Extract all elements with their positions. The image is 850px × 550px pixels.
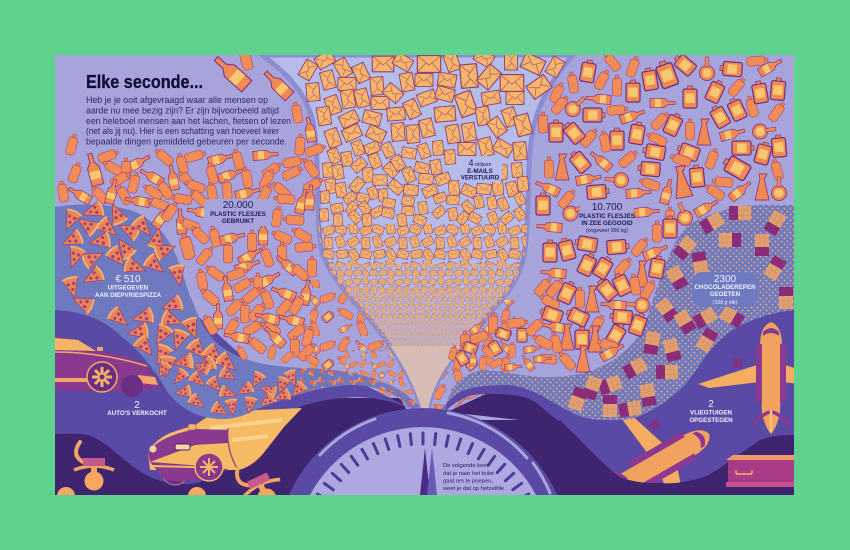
email funnel background	[262, 55, 573, 412]
toilet note: gaat om te poepen,	[443, 478, 493, 484]
label: plastic bottles used	[204, 199, 272, 226]
label: bottles in the sea	[579, 200, 635, 235]
label: emails: 4 miljoen	[469, 158, 492, 168]
intro text: (net als jij nu). Hier is een schatting van hoeveel keer	[86, 126, 279, 136]
big bottles at top	[213, 55, 326, 158]
envelopes	[298, 48, 565, 227]
dark purple lower band	[55, 392, 794, 495]
label: cars	[107, 401, 167, 415]
coffin	[726, 455, 794, 487]
intro text: Heb je je ooit afgevraagd waar alle mensen op	[86, 95, 268, 105]
label: chocolate: GEGETEN	[710, 291, 741, 298]
label: cars: AUTO'S VERKOCHT	[107, 410, 167, 417]
left plastic bottles	[57, 133, 325, 366]
label: pizza: UITGEGEVEN	[108, 284, 149, 292]
label: planes	[690, 400, 732, 422]
chocolate region	[440, 205, 794, 420]
label: emails: E-MAILS	[467, 168, 493, 175]
car region	[55, 300, 412, 484]
label: chocolate: (100 g elk)	[713, 300, 738, 306]
label: bottles in the sea: IN ZEE GEGOOID	[581, 220, 633, 227]
toilet note: De volgende keer	[443, 463, 489, 469]
label: bottles in the sea: PLASTIC FLESJES	[579, 213, 635, 220]
label: emails: VERSTUURD	[461, 174, 500, 182]
label: planes: VLIEGTUIGEN	[690, 410, 732, 416]
toilet note: weet je dat op hetzelfde	[442, 486, 504, 492]
alarm clock dial	[289, 408, 557, 500]
intro text: aarde nu mee bezig zijn? Er zijn bijvoorbeeld altijd	[86, 106, 279, 116]
intro text	[86, 95, 291, 146]
label: pizza	[95, 275, 161, 297]
yellow car	[148, 408, 302, 485]
left car	[55, 336, 160, 397]
intro text: een heleboel mensen aan het lachen, fietsen of lezen	[86, 116, 291, 126]
pacifiers	[57, 440, 280, 495]
label: planes: OPGESTEGEN	[689, 417, 733, 424]
toilet note: dat je naar het toilet	[443, 471, 494, 477]
plane region	[440, 300, 794, 483]
label: bottles in the sea: (ongeveer 350 kg)	[586, 228, 628, 234]
label: chocolate: 2300	[714, 274, 737, 285]
chocolate bars	[568, 206, 793, 418]
label: chocolate: CHOCOLADEREPEN	[694, 284, 756, 291]
label: planes: 2	[708, 399, 714, 410]
label: plastic bottles used: GEBRUIKT	[222, 218, 254, 225]
label: bottles in the sea: 10.700	[592, 202, 623, 213]
label: pizza: € 510	[115, 274, 141, 285]
pizza slices	[59, 200, 308, 420]
label: emails	[459, 156, 502, 182]
label: pizza: AAN DIEPVRIESPIZZA	[95, 292, 162, 299]
infographic spread	[55, 55, 794, 495]
label: plastic bottles used: 20.000	[223, 200, 254, 211]
airplanes	[611, 322, 794, 484]
pizza region	[55, 205, 420, 419]
label: cars: 2	[134, 400, 140, 411]
label: chocolate	[692, 272, 758, 307]
title: Elke seconde...	[86, 72, 203, 92]
right bottles	[448, 51, 787, 372]
label: plastic bottles used: PLASTIC FLESJES	[210, 211, 266, 218]
intro text: bepaalde dingen gemiddeld gebeuren per seconde.	[86, 136, 287, 146]
dark wedge trimming lower plane	[560, 420, 760, 495]
